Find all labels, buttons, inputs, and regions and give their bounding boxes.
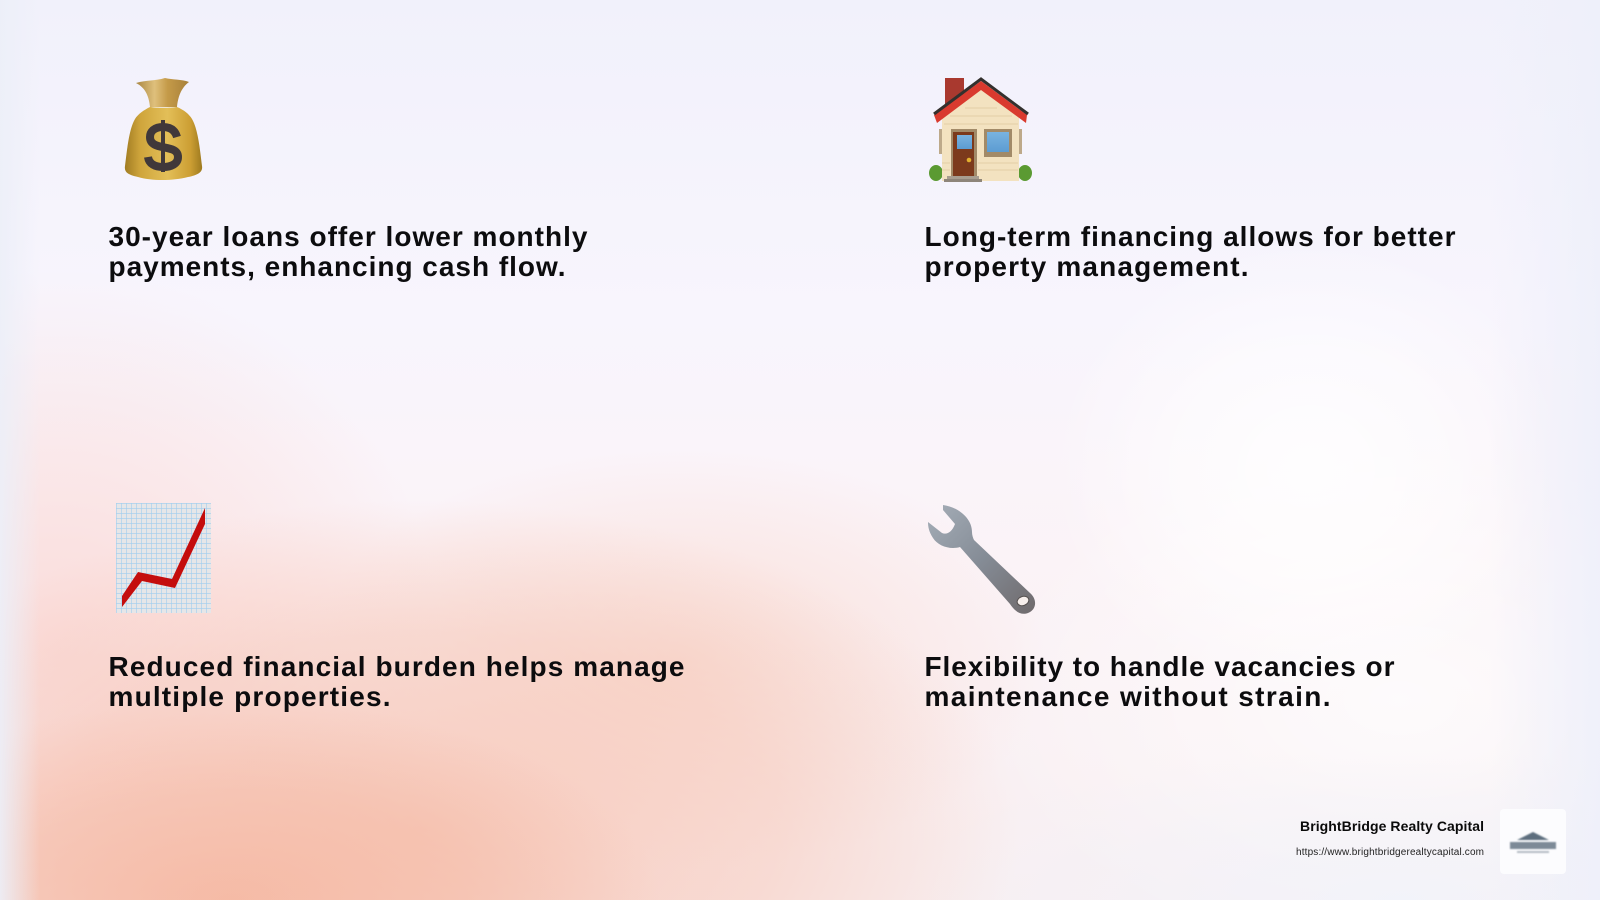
panel: property management bbox=[924, 78, 1456, 282]
heading: cash flow benefit: 30-year loans offer lower monthly bbox=[108, 221, 588, 252]
logo card bbox=[1500, 809, 1566, 874]
icon: rising chart bbox=[116, 503, 211, 613]
heading: property management benefit: property management. bbox=[924, 251, 1248, 282]
heading: financial burden benefit: multiple properties. bbox=[108, 681, 390, 712]
heading: flexibility benefit: Flexibility to handle vacancies or bbox=[924, 651, 1395, 682]
company name: BrightBridge Realty Capital bbox=[1300, 818, 1484, 834]
icon: money bag bbox=[125, 78, 202, 180]
company url: https://www.brightbridgerealtycapital.com bbox=[1296, 847, 1484, 858]
heading: cash flow benefit: payments, enhancing cash flow. bbox=[108, 251, 566, 282]
icon: wrench bbox=[928, 505, 1035, 614]
panel: flexibility bbox=[924, 505, 1395, 712]
icon: house bbox=[929, 78, 1032, 182]
heading: financial burden benefit bbox=[108, 651, 684, 712]
footer: company branding bbox=[1296, 809, 1566, 874]
panel: lower monthly payments bbox=[108, 78, 588, 282]
heading: flexibility benefit: maintenance without strain. bbox=[924, 681, 1330, 712]
heading: cash flow benefit bbox=[108, 221, 588, 282]
heading: financial burden benefit: Reduced financial burden helps manage bbox=[108, 651, 684, 682]
heading: flexibility benefit bbox=[924, 651, 1395, 712]
heading: property management benefit: Long-term financing allows for better bbox=[924, 221, 1456, 252]
heading: property management benefit bbox=[924, 221, 1456, 282]
panel: multiple properties bbox=[108, 503, 684, 712]
